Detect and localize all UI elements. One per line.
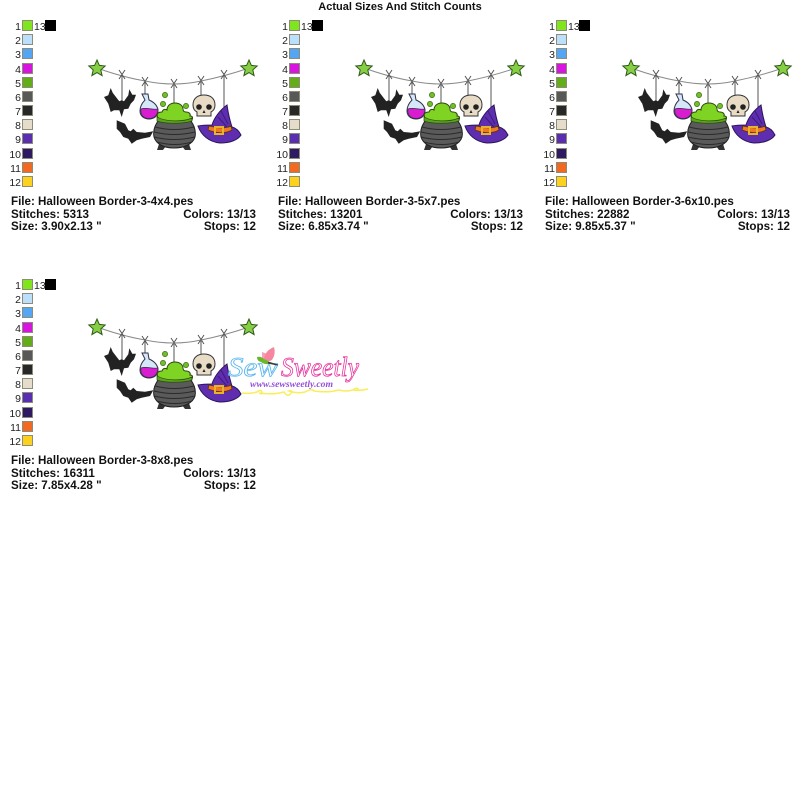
panel: 8x8 design bbox=[9, 279, 257, 492]
colour swatches: 11 bbox=[544, 163, 555, 175]
colour swatches: 11 bbox=[277, 163, 288, 175]
colour swatches: 8 bbox=[549, 120, 555, 132]
colour swatches: 1 bbox=[549, 21, 555, 33]
colour swatches: 8 bbox=[15, 120, 21, 132]
colour swatches: 13 bbox=[34, 280, 46, 292]
watermark: Sew Sweetly logo bbox=[228, 347, 368, 395]
file details: File: Halloween Border-3-4x4.pes bbox=[11, 195, 193, 208]
colour swatches: 7 bbox=[549, 106, 555, 118]
file details bbox=[545, 195, 791, 233]
colour swatches: 4 bbox=[549, 64, 555, 76]
file details: File: Halloween Border-3-5x7.pes bbox=[278, 195, 460, 208]
file details: Size: 6.85x3.74 " bbox=[278, 220, 369, 233]
colour swatches: 9 bbox=[549, 134, 555, 146]
colour swatches: 6 bbox=[15, 351, 21, 363]
colour swatches: 8 bbox=[15, 379, 21, 391]
colour swatches: 1 bbox=[15, 280, 21, 292]
colour swatches: 13 bbox=[301, 21, 313, 33]
colour swatches: 12 bbox=[543, 177, 555, 189]
file details: Stitches: 5313 bbox=[11, 208, 90, 221]
colour swatches: 8 bbox=[282, 120, 288, 132]
file details: Stitches: 13201 bbox=[278, 208, 363, 221]
file details: Stops: 12 bbox=[204, 479, 256, 492]
file details bbox=[11, 454, 257, 492]
file details: Size: 7.85x4.28 " bbox=[11, 479, 102, 492]
colour swatches: 5 bbox=[15, 78, 21, 90]
colour swatches: 9 bbox=[15, 393, 21, 405]
colour swatches: 4 bbox=[15, 323, 21, 335]
embroidery art bbox=[356, 60, 524, 150]
colour swatches: 12 bbox=[9, 436, 21, 448]
file details: Stops: 12 bbox=[471, 220, 523, 233]
colour swatches: 5 bbox=[282, 78, 288, 90]
colour swatches: 3 bbox=[15, 49, 21, 61]
embroidery art bbox=[623, 60, 791, 150]
embroidery art bbox=[89, 60, 257, 150]
colour swatches: 2 bbox=[15, 294, 21, 306]
colour swatches: 1 bbox=[15, 21, 21, 33]
colour swatches: 2 bbox=[549, 35, 555, 47]
panel: 4x4 design bbox=[9, 20, 257, 233]
title: Actual Sizes And Stitch Counts bbox=[318, 1, 482, 13]
colour swatches: 5 bbox=[549, 78, 555, 90]
file details: Colors: 13/13 bbox=[717, 208, 791, 221]
watermark word: Sweetly: Sweetly bbox=[281, 352, 359, 382]
file details: Colors: 13/13 bbox=[183, 208, 257, 221]
colour swatches: 12 bbox=[9, 177, 21, 189]
colour swatches: 10 bbox=[9, 149, 21, 161]
yellow flourish bbox=[242, 388, 368, 395]
file details: File: Halloween Border-3-8x8.pes bbox=[11, 454, 193, 467]
colour swatches: 7 bbox=[282, 106, 288, 118]
colour swatches: 1 bbox=[282, 21, 288, 33]
file details: Stops: 12 bbox=[738, 220, 790, 233]
file details: Stops: 12 bbox=[204, 220, 256, 233]
panel: 5x7 design bbox=[276, 20, 524, 233]
colour swatches: 4 bbox=[15, 64, 21, 76]
colour swatches: 6 bbox=[282, 92, 288, 104]
colour swatches: 3 bbox=[282, 49, 288, 61]
file details: Stitches: 16311 bbox=[11, 467, 95, 480]
colour swatches: 13 bbox=[34, 21, 46, 33]
colour swatches: 11 bbox=[10, 163, 21, 175]
colour swatches: 2 bbox=[15, 35, 21, 47]
colour swatches: 7 bbox=[15, 365, 21, 377]
file details: Size: 3.90x2.13 " bbox=[11, 220, 102, 233]
file details bbox=[278, 195, 524, 233]
file details: Size: 9.85x5.37 " bbox=[545, 220, 636, 233]
colour swatches bbox=[9, 20, 56, 189]
icon: hummingbird bbox=[257, 347, 278, 365]
colour swatches: 7 bbox=[15, 106, 21, 118]
file details: File: Halloween Border-3-6x10.pes bbox=[545, 195, 734, 208]
colour swatches: 6 bbox=[549, 92, 555, 104]
embroidery art bbox=[89, 319, 257, 409]
colour swatches: 10 bbox=[543, 149, 555, 161]
colour swatches: 13 bbox=[568, 21, 580, 33]
panel: 6x10 design bbox=[543, 20, 791, 233]
colour swatches: 9 bbox=[15, 134, 21, 146]
colour swatches: 4 bbox=[282, 64, 288, 76]
colour swatches bbox=[276, 20, 323, 189]
colour swatches: 5 bbox=[15, 337, 21, 349]
colour swatches bbox=[543, 20, 590, 189]
file details: Colors: 13/13 bbox=[450, 208, 524, 221]
colour swatches: 9 bbox=[282, 134, 288, 146]
colour swatches: 3 bbox=[15, 308, 21, 320]
watermark word: Sew: Sew bbox=[228, 352, 278, 382]
colour swatches: 10 bbox=[276, 149, 288, 161]
file details: Stitches: 22882 bbox=[545, 208, 629, 221]
colour swatches: 3 bbox=[549, 49, 555, 61]
watermark url: www.sewsweetly.com bbox=[250, 380, 333, 390]
colour swatches: 6 bbox=[15, 92, 21, 104]
colour swatches: 12 bbox=[276, 177, 288, 189]
colour swatches: 2 bbox=[282, 35, 288, 47]
colour swatches: 11 bbox=[10, 422, 21, 434]
file details bbox=[11, 195, 257, 233]
colour swatches bbox=[9, 279, 56, 448]
colour swatches: 10 bbox=[9, 408, 21, 420]
file details: Colors: 13/13 bbox=[183, 467, 257, 480]
